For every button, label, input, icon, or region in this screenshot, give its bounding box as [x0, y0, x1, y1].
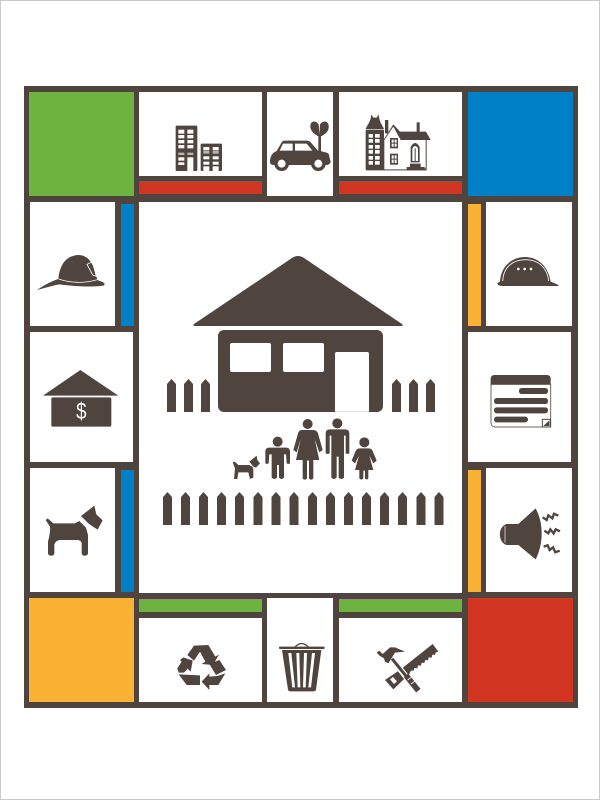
family with dog [233, 418, 377, 480]
small fence left [167, 379, 210, 412]
illustration: central house with fence and family [163, 256, 444, 525]
icon: recycling symbol [177, 645, 226, 690]
house windows [230, 343, 324, 372]
center panel [139, 202, 462, 593]
house roof [193, 256, 403, 326]
icon: house with dollar sign: $ [76, 399, 87, 425]
bottom row cells [139, 598, 462, 702]
icon: firefighter helmet [37, 255, 105, 290]
right column cells [468, 202, 572, 592]
top row cells [139, 92, 462, 196]
icon: dog [46, 506, 103, 556]
red color bars [139, 181, 462, 194]
corner: blue [468, 92, 573, 196]
house body [218, 330, 383, 412]
icon: house with dollar sign [43, 370, 118, 427]
woman [293, 419, 323, 480]
dog [233, 456, 260, 479]
icon: victorian house [366, 114, 431, 170]
icon: notice document [491, 375, 551, 427]
icon: trash can [279, 643, 325, 691]
yellow color bars [468, 204, 481, 592]
icon: hammer and saw [377, 644, 438, 691]
boy [265, 437, 290, 479]
corner: green [29, 92, 134, 196]
icon: loudspeaker [500, 508, 560, 559]
icon: hard hat [497, 257, 559, 286]
icon: car with balloon [270, 122, 331, 171]
icon: apartment buildings [176, 126, 222, 171]
blue color bars [121, 204, 134, 592]
large front fence [163, 492, 444, 525]
man [326, 418, 349, 479]
girl [352, 437, 377, 479]
small fence right [392, 379, 435, 412]
green color bars [139, 599, 462, 612]
house door [335, 352, 369, 412]
corner: red [468, 598, 573, 702]
board frame [24, 86, 578, 708]
corner: yellow [29, 598, 134, 702]
left column cells [30, 202, 133, 592]
